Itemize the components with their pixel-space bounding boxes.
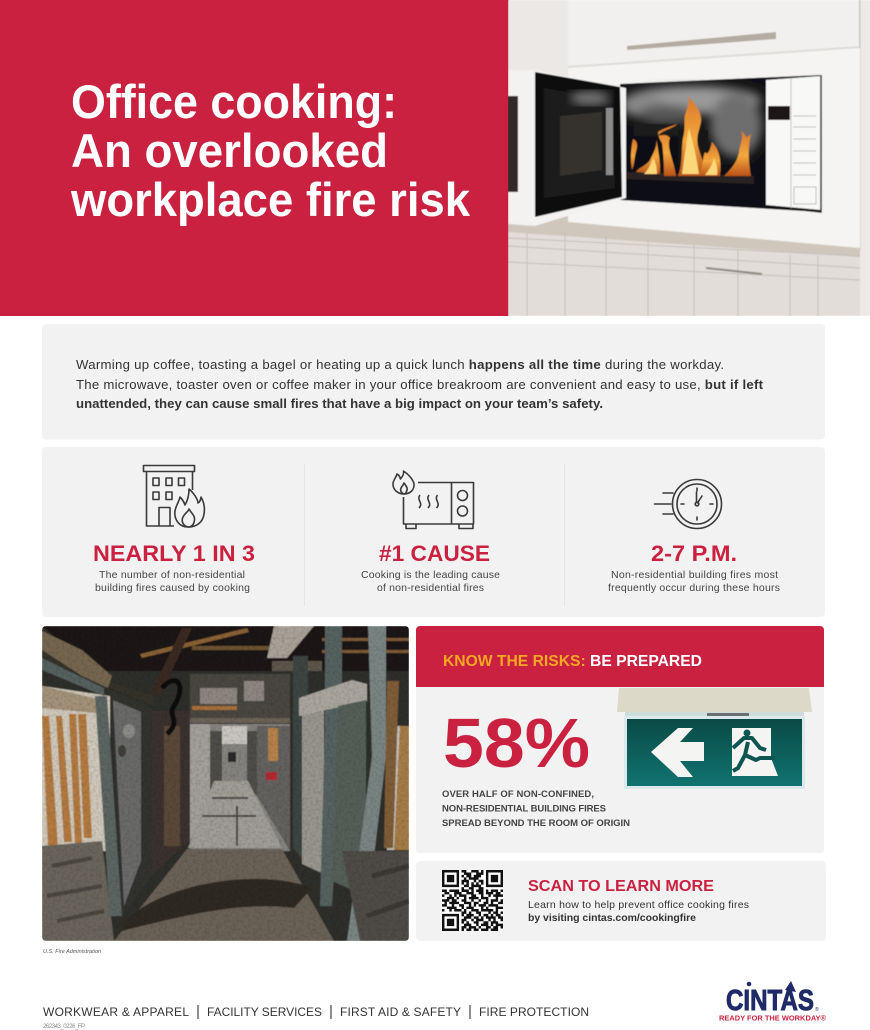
statistic description: NON-RESIDENTIAL BUILDING FIRES — [442, 804, 606, 814]
call to action text: by visiting cintas.com/cookingfire — [528, 912, 696, 924]
stat: nearly 1 in 3: building fires caused by cooking — [95, 582, 250, 594]
statistic description: SPREAD BEYOND THE ROOM OF ORIGIN — [442, 818, 630, 829]
call to action heading: SCAN TO LEARN MORE — [528, 878, 714, 895]
title panel — [0, 0, 509, 316]
panel: intro text: unattended, they can cause small fires that have a big impact on your team’s safety. — [76, 396, 603, 411]
photo: fire-damaged corridor — [42, 626, 409, 941]
logo: Cintas: ® — [815, 1006, 819, 1013]
panel: intro text — [42, 324, 825, 440]
big number: 58% — [443, 704, 590, 782]
QR code — [442, 870, 503, 931]
stat: number one cause: #1 CAUSE — [379, 541, 490, 566]
panel heading: KNOW THE RISKS: BE PREPARED — [443, 653, 702, 670]
logo: Cintas: READY FOR THE WORKDAY® — [719, 1014, 827, 1022]
stat: number one cause — [361, 541, 500, 594]
stat: peak hours: Non-residential building fires most — [611, 569, 778, 581]
logo: Cintas — [719, 981, 827, 1022]
panel: intro text: Warming up coffee, toasting a bagel or heating up a quick lunch happens all the time during the workday. — [76, 357, 724, 372]
photo: exit sign — [617, 688, 812, 789]
stat: nearly 1 in 3: The number of non-residential — [99, 569, 245, 581]
footer services: FACILITY SERVICES — [207, 1005, 322, 1019]
icon: clock — [654, 480, 722, 528]
footer services: FIRE PROTECTION — [479, 1005, 589, 1019]
panel: statistics — [42, 447, 825, 617]
footer services: WORKWEAR & APPAREL — [43, 1005, 189, 1019]
call to action text: Learn how to help prevent office cooking fires — [528, 899, 749, 911]
stat: nearly 1 in 3 — [93, 541, 255, 594]
statistic description — [442, 789, 630, 829]
flames — [631, 96, 751, 176]
stat: nearly 1 in 3: NEARLY 1 IN 3 — [93, 541, 255, 566]
title: Office cooking: — [71, 75, 397, 128]
stat: peak hours: frequently occur during these hours — [608, 582, 780, 594]
icon: building on fire — [144, 466, 204, 527]
statistic description: OVER HALF OF NON-CONFINED, — [442, 789, 594, 800]
stat: peak hours: 2-7 P.M. — [651, 541, 737, 566]
footer services — [43, 1005, 589, 1019]
document code: 262343_0226_FP — [43, 1024, 85, 1030]
panel: intro text: The microwave, toaster oven or coffee maker in your office breakroom are convenient and easy to use, but if left — [76, 377, 764, 392]
stat: number one cause: Cooking is the leading cause — [361, 569, 500, 581]
footer services: FIRST AID & SAFETY — [340, 1005, 461, 1019]
panel: scan to learn more — [416, 861, 826, 941]
title — [70, 75, 471, 226]
stat: peak hours — [608, 541, 780, 594]
icon: microwave on fire — [393, 471, 474, 528]
title: workplace fire risk — [70, 173, 471, 226]
logo: Cintas: CINTAS — [726, 985, 814, 1017]
call to action text — [528, 899, 749, 924]
stat: number one cause: of non-residential fires — [377, 582, 484, 594]
source note: U.S. Fire Administration — [43, 949, 101, 955]
panel: know the risks — [416, 626, 824, 853]
title: An overlooked — [71, 124, 388, 177]
photo: burning microwave — [508, 0, 870, 316]
